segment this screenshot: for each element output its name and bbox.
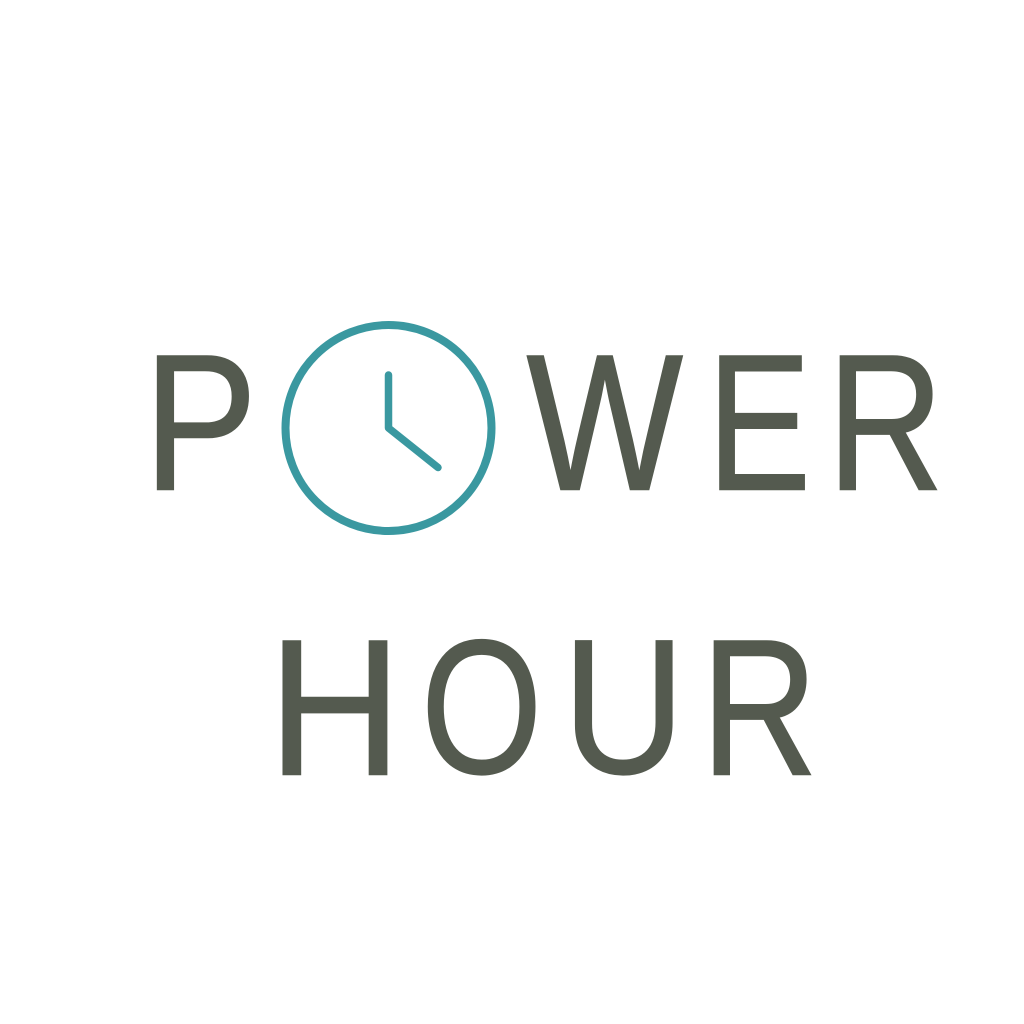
heading line: HOUR: [268, 599, 818, 816]
heading line: HOUR: O: [421, 600, 542, 814]
heading line: POWER: P: [144, 314, 257, 531]
heading line: HOUR: H: [268, 600, 402, 816]
heading line: HOUR: U: [562, 600, 685, 814]
heading line: POWER: [144, 314, 944, 531]
heading line: POWER: E: [707, 315, 811, 531]
heading line: HOUR: R: [701, 599, 818, 816]
heading line: POWER: R: [827, 314, 944, 531]
heading line: POWER: W: [526, 315, 683, 531]
icon: clock replacing the letter O: [286, 325, 492, 531]
